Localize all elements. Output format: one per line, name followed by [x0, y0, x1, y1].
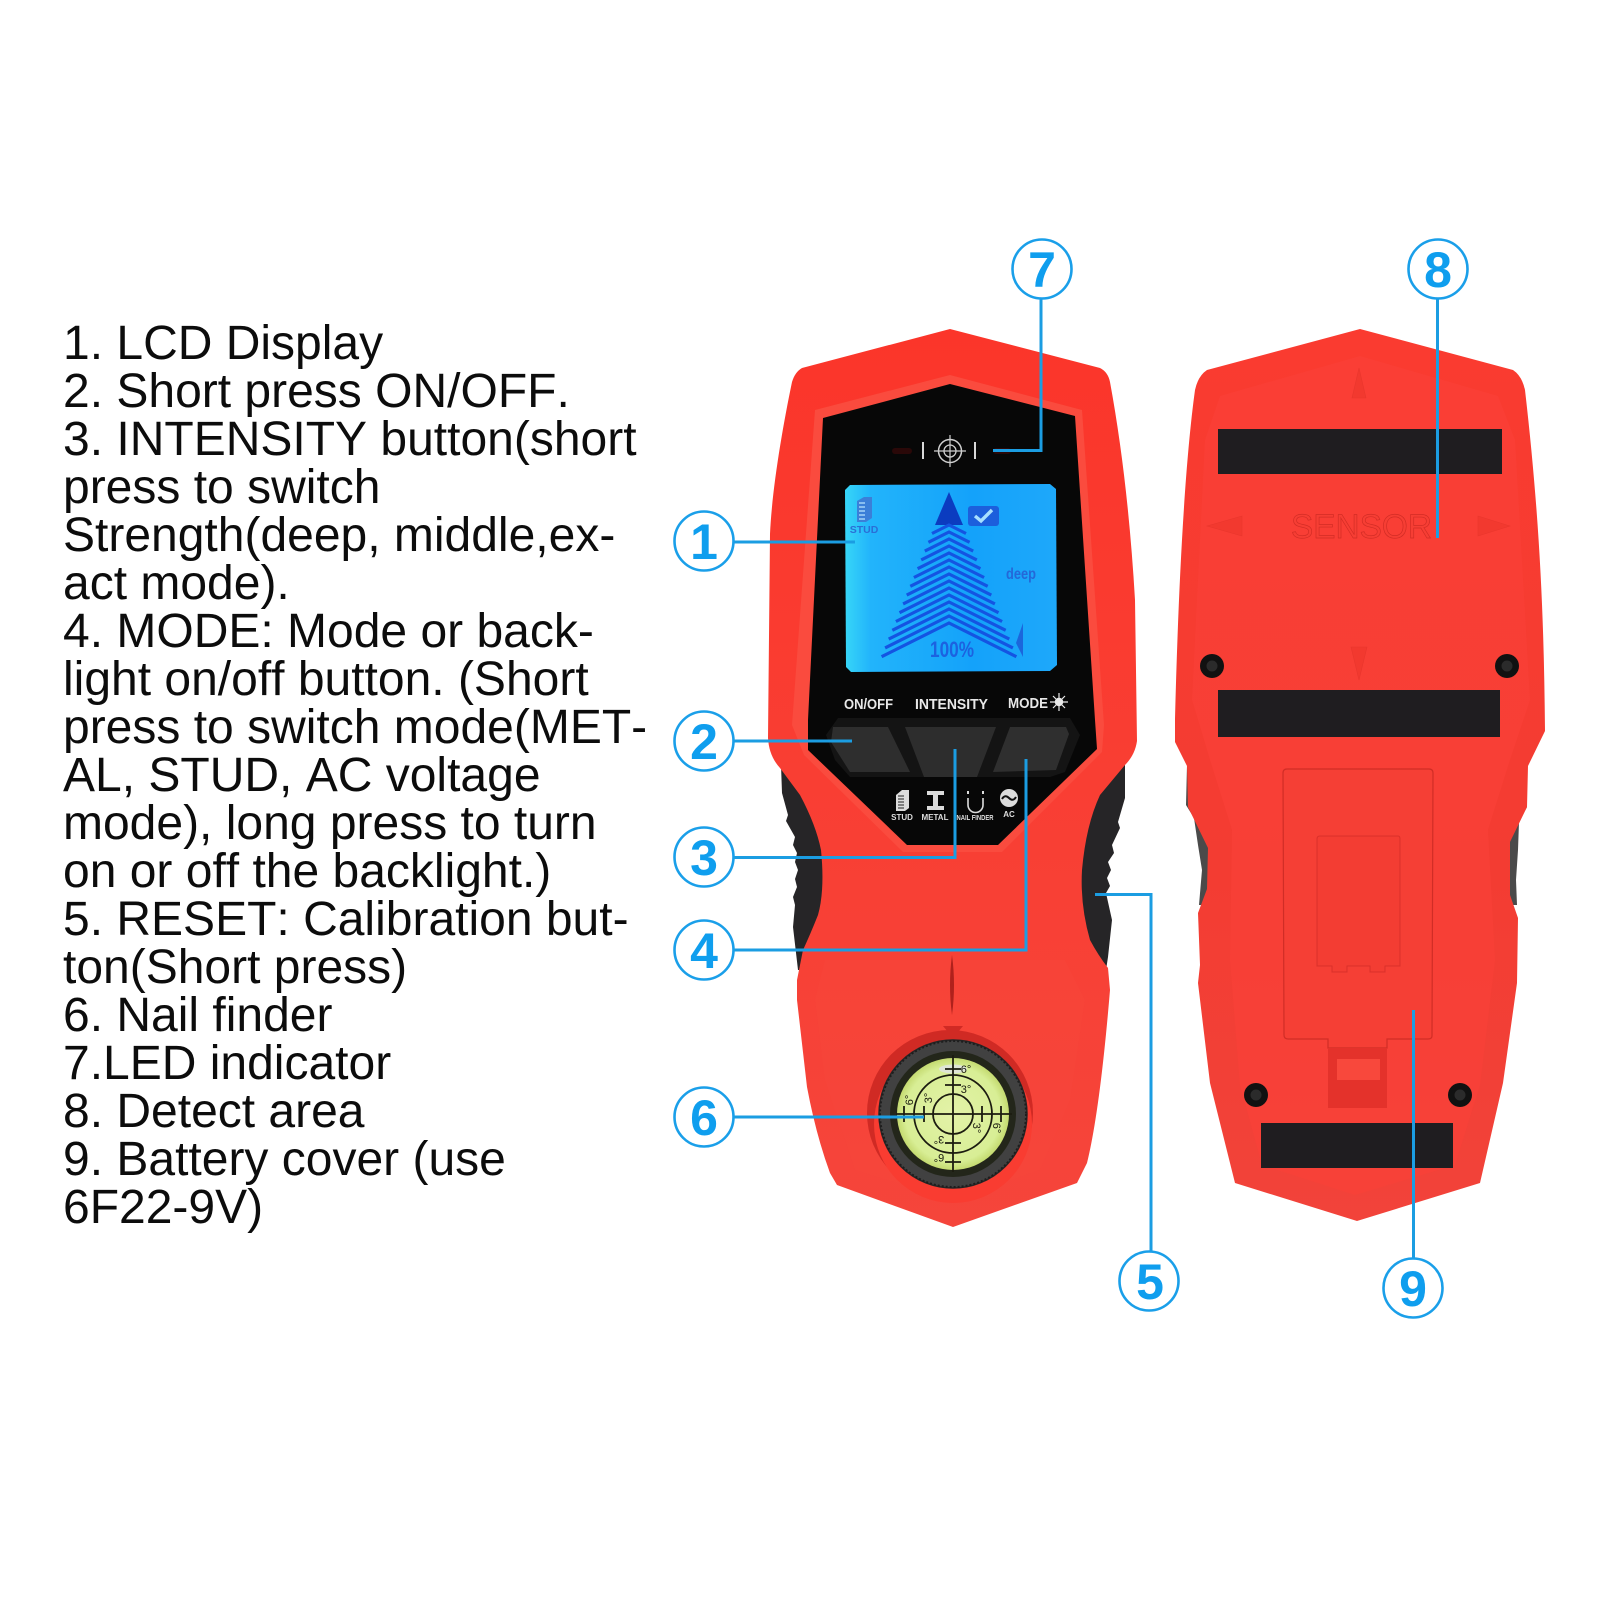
parts list text: 2. Short press ON/OFF. — [63, 365, 570, 418]
parts list text: 6F22-9V) — [63, 1181, 263, 1234]
mode icons row — [891, 789, 1018, 822]
deep label: deep — [1006, 566, 1036, 583]
icon: nail finder: NAIL FINDER — [956, 813, 994, 822]
degree marks: 3° — [961, 1084, 971, 1096]
signal arrow head — [935, 492, 963, 525]
parts list text: mode), long press to turn — [63, 797, 597, 850]
red back body — [1175, 329, 1545, 1221]
bezel highlight around panel — [792, 375, 1104, 852]
stud mode icon — [850, 497, 879, 536]
stud mode icon: STUD — [850, 524, 879, 536]
parts list text: press to switch — [63, 461, 380, 514]
parts list text: 7.LED indicator — [63, 1037, 391, 1090]
icon: metal: METAL — [922, 813, 949, 822]
callout 1 — [674, 512, 855, 570]
callout 5: 5 — [1136, 1254, 1164, 1310]
parts list text: AL, STUD, AC voltage — [63, 749, 541, 802]
callout 1: 1 — [690, 514, 718, 570]
parts list text: ton(Short press) — [63, 941, 407, 994]
button labels: INTENSITY — [915, 697, 988, 713]
back grip teeth left — [1186, 765, 1215, 905]
icon: AC: AC — [1003, 810, 1015, 819]
callout 7: 7 — [1028, 242, 1056, 298]
LED indicator row — [892, 435, 1011, 467]
icon: backlight sun — [1050, 693, 1068, 711]
alignment slot — [950, 955, 954, 1015]
lighter lower body facet — [815, 960, 1085, 1200]
callout 9 — [1384, 1010, 1442, 1318]
parts list text: 4. MODE: Mode or back- — [63, 605, 594, 658]
back grip teeth right — [1500, 770, 1527, 905]
degree marks: 6° — [934, 1151, 944, 1163]
bubble level — [867, 1026, 1033, 1203]
right black grip — [1060, 765, 1125, 970]
embossed sensor label: SENSOR — [1291, 508, 1432, 546]
velcro strip top — [1218, 429, 1502, 474]
red front body — [768, 329, 1137, 1227]
callout 6 — [674, 1088, 924, 1146]
parts list text: on or off the backlight.) — [63, 845, 551, 898]
check mark badge — [968, 506, 999, 526]
embossed arrows — [1207, 368, 1510, 680]
callout 8: 8 — [1424, 242, 1452, 298]
degree marks — [904, 1064, 1002, 1163]
callout 4 — [674, 759, 1026, 980]
parts list text: 6. Nail finder — [63, 989, 332, 1042]
degree marks: 3° — [923, 1093, 935, 1103]
left black grip — [781, 765, 850, 970]
degree marks: 3° — [934, 1133, 944, 1145]
velcro strip middle — [1218, 690, 1500, 737]
parts list text: 1. LCD Display — [63, 317, 383, 370]
callout 5 — [1095, 894, 1178, 1310]
control buttons — [826, 718, 1080, 777]
callout 3 — [674, 749, 955, 886]
parts list text: Strength(deep, middle,ex- — [63, 509, 615, 562]
bubble — [939, 1064, 967, 1074]
button labels: ON/OFF — [844, 697, 893, 713]
parts list text: 9. Battery cover (use — [63, 1133, 506, 1186]
battery cover — [1283, 769, 1433, 1108]
screws — [1200, 654, 1519, 1107]
raised back plate — [1192, 356, 1530, 1195]
LCD screen — [845, 484, 1057, 672]
parts list text — [63, 317, 647, 1234]
chevron signal bars — [882, 525, 1016, 657]
callout 8 — [1408, 240, 1468, 538]
degree marks: 6° — [990, 1123, 1002, 1133]
callout 2: 2 — [690, 714, 718, 770]
level pointer — [1016, 623, 1023, 657]
black front panel — [808, 384, 1097, 845]
degree marks: 6° — [904, 1095, 916, 1105]
callout 4: 4 — [690, 923, 718, 979]
callout 7 — [993, 240, 1072, 450]
parts list text: press to switch mode(MET- — [63, 701, 647, 754]
level rings and crosshair — [896, 1055, 1012, 1172]
callout 2 — [674, 712, 852, 770]
parts list text: light on/off button. (Short — [63, 653, 589, 706]
callout 9: 9 — [1399, 1261, 1427, 1317]
back view of device — [1175, 329, 1545, 1221]
parts list text: 3. INTENSITY button(short — [63, 413, 637, 466]
front view of device — [768, 329, 1137, 1227]
button labels — [844, 693, 1068, 713]
callout 3: 3 — [690, 830, 718, 886]
parts list text: 8. Detect area — [63, 1085, 365, 1138]
degree marks: 3° — [970, 1123, 982, 1133]
callout 6: 6 — [690, 1090, 718, 1146]
parts list text: 5. RESET: Calibration but- — [63, 893, 629, 946]
button labels: MODE — [1008, 696, 1048, 712]
icon: stud: STUD — [891, 813, 913, 822]
velcro strip bottom — [1261, 1123, 1453, 1168]
percent readout: 100% — [930, 637, 974, 662]
degree marks: 6° — [961, 1064, 971, 1076]
parts list text: act mode). — [63, 557, 290, 610]
